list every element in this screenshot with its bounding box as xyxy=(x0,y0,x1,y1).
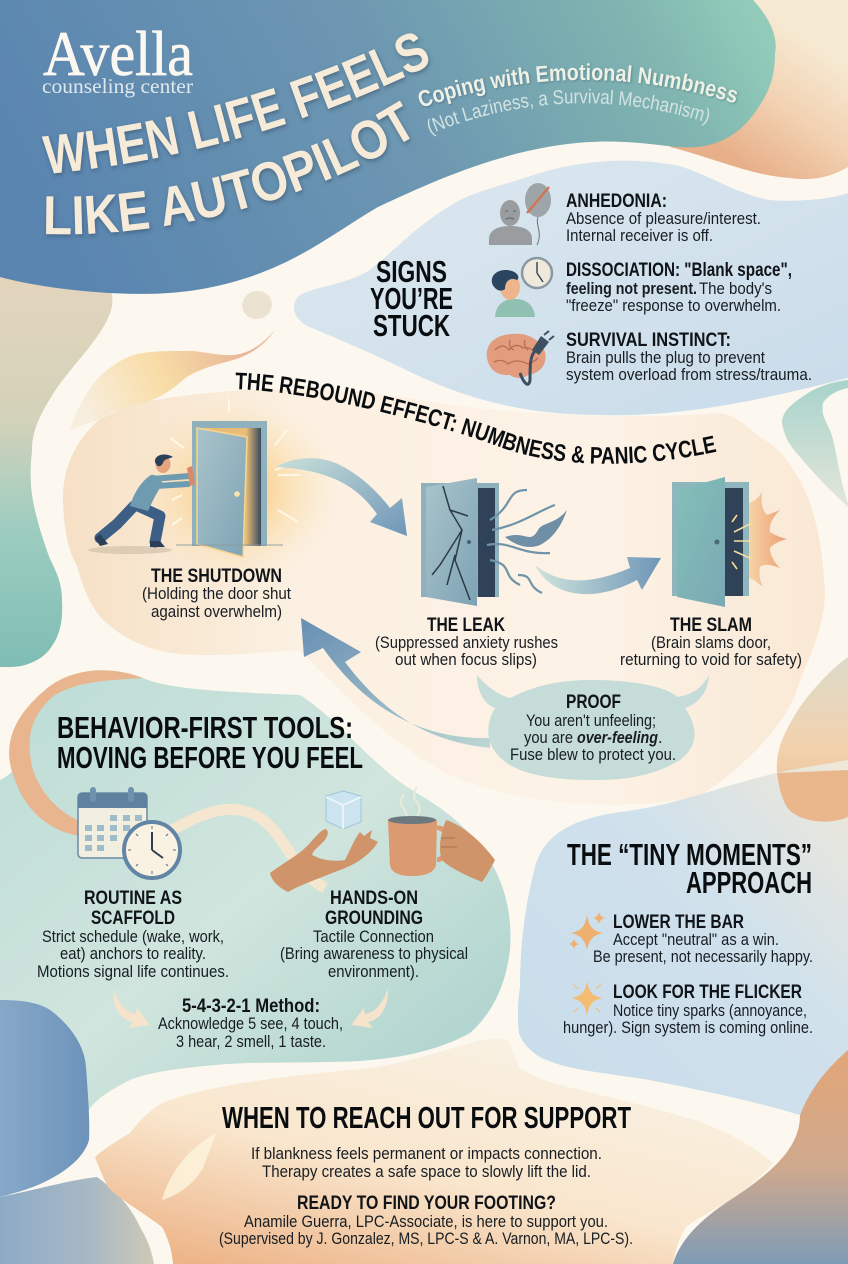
heading: when to reach out: WHEN TO REACH OUT FOR SUPPORT xyxy=(222,1100,631,1135)
text: hands-on grounding: environment). xyxy=(328,963,419,981)
text: ready to find your footing: (Supervised by J. Gonzalez, MS, LPC-S & A. Varnon, MA, LPC-S). xyxy=(219,1230,633,1248)
heading: the rebound effect: THE REBOUND EFFECT: NUMBNESS & PANIC CYCLE xyxy=(236,372,716,464)
heading: tiny moments xyxy=(567,837,812,900)
heading: signs you're stuck: STUCK xyxy=(373,308,450,343)
text: survival instinct: SURVIVAL INSTINCT: xyxy=(566,330,731,351)
text: 5-4-3-2-1 method: 3 hear, 2 smell, 1 taste. xyxy=(176,1033,326,1051)
heading: behavior-first tools: BEHAVIOR-FIRST TOOLS: xyxy=(57,710,353,745)
text: hands-on grounding: GROUNDING xyxy=(325,908,423,929)
title: When life feels like autopilot: WHEN LIFE FEELS xyxy=(42,33,431,177)
text: dissociation: feeling not present. xyxy=(566,280,697,298)
illustration: shutdown door and person xyxy=(88,395,340,585)
callout: proof: Fuse blew to protect you. xyxy=(510,746,676,764)
icon: sparkles xyxy=(569,912,605,950)
icon: flicker spark xyxy=(571,981,603,1016)
text: lower the bar xyxy=(593,912,813,966)
icon: calendar and clock xyxy=(78,787,180,878)
text: ready to find your footing: Anamile Guerra, LPC-Associate, is here to support you. xyxy=(244,1213,608,1231)
label: the slam xyxy=(620,615,802,669)
label: the shutdown xyxy=(142,566,291,621)
text: anhedonia xyxy=(566,191,761,245)
callout: proof: . xyxy=(658,729,663,747)
text: look for the flicker: LOOK FOR THE FLICKER xyxy=(613,982,802,1003)
text: anhedonia: Internal receiver is off. xyxy=(566,227,713,245)
subtitle: coping with emotional numbness xyxy=(418,63,739,136)
text: look for the flicker: hunger). Sign system is coming online. xyxy=(563,1019,813,1037)
text: routine as scaffold xyxy=(37,888,229,981)
illustration: cracked door with leak xyxy=(421,478,567,606)
callout: proof xyxy=(477,675,709,780)
text: dissociation xyxy=(566,260,792,315)
heading: behavior-first tools xyxy=(57,710,363,775)
logo: Avella counseling center: Avella xyxy=(43,18,193,89)
heading: signs you're stuck xyxy=(370,254,453,343)
icon: grey person with crossed balloon xyxy=(489,183,551,245)
arrow: shutdown to leak xyxy=(276,458,407,536)
text: survival instinct: Brain pulls the plug to prevent xyxy=(566,349,765,367)
text: therapy message: If blankness feels permanent or impacts connection. xyxy=(251,1145,602,1163)
text: survival instinct xyxy=(566,330,812,384)
logo: Avella counseling center: counseling center xyxy=(42,74,193,98)
subtitle: coping with emotional numbness: Coping with Emotional Numbness xyxy=(418,63,739,108)
text: ready to find your footing: READY TO FIND YOUR FOOTING? xyxy=(297,1193,556,1214)
label: the shutdown: (Holding the door shut xyxy=(142,585,291,603)
arrow: grounding to method xyxy=(351,988,388,1028)
panel: signs you're stuck xyxy=(294,161,848,415)
label: the leak: (Suppressed anxiety rushes xyxy=(375,634,558,652)
text: therapy message xyxy=(251,1145,602,1181)
heading: signs you're stuck: SIGNS xyxy=(376,254,447,289)
arrow: proof back to shutdown xyxy=(301,618,490,748)
text: dissociation: The body's xyxy=(699,280,772,298)
text: routine as scaffold: Strict schedule (wake, work, xyxy=(42,928,224,946)
text: survival instinct: system overload from stress/trauma. xyxy=(566,366,812,384)
icon: brain with unplugged cord xyxy=(487,331,554,384)
text: anhedonia: ANHEDONIA: xyxy=(566,191,667,212)
text: hands-on grounding: Tactile Connection xyxy=(313,928,434,946)
subtitle: coping with emotional numbness: (Not Laziness, a Survival Mechanism) xyxy=(428,88,710,136)
text: 5-4-3-2-1 method: 5-4-3-2-1 Method: xyxy=(182,996,320,1017)
text: lower the bar: LOWER THE BAR xyxy=(613,912,744,933)
label: the leak: out when focus slips) xyxy=(395,651,537,669)
text: therapy message: Therapy creates a safe space to slowly lift the lid. xyxy=(262,1163,591,1181)
text: 5-4-3-2-1 method xyxy=(158,996,343,1051)
panel: behavior-first tools xyxy=(0,670,510,1110)
text: routine as scaffold: SCAFFOLD xyxy=(91,908,175,929)
text: lower the bar: Be present, not necessarily happy. xyxy=(593,948,813,966)
label: the leak xyxy=(375,615,558,669)
text: ready to find your footing xyxy=(219,1193,633,1248)
panel: tiny moments approach xyxy=(518,760,848,1115)
icon: hand holding warm mug xyxy=(388,787,495,882)
heading: signs you're stuck: YOU’RE xyxy=(370,281,453,316)
label: the slam: (Brain slams door, xyxy=(651,634,771,652)
panel: when to reach out xyxy=(95,1039,773,1264)
label: the slam: THE SLAM xyxy=(670,615,752,636)
text: hands-on grounding xyxy=(280,888,468,981)
callout: proof: over-feeling xyxy=(577,729,658,747)
text: dissociation: "freeze" response to overwhelm. xyxy=(566,297,781,315)
text: look for the flicker: Notice tiny sparks (annoyance, xyxy=(613,1002,807,1020)
text: look for the flicker xyxy=(563,982,813,1037)
text: routine as scaffold: ROUTINE AS xyxy=(84,888,182,909)
text: hands-on grounding: HANDS-ON xyxy=(330,888,418,909)
text: hands-on grounding: (Bring awareness to physical xyxy=(280,945,468,963)
callout: proof: you are xyxy=(524,729,573,747)
text: routine as scaffold: Motions signal life continues. xyxy=(37,963,229,981)
text: routine as scaffold: eat) anchors to reality. xyxy=(60,945,206,963)
label: the slam: returning to void for safety) xyxy=(620,651,802,669)
text: anhedonia: Absence of pleasure/interest. xyxy=(566,210,761,228)
callout: proof: You aren't unfeeling; xyxy=(526,712,656,730)
panel: title banner xyxy=(0,0,776,294)
label: the shutdown: THE SHUTDOWN xyxy=(151,566,282,587)
heading: behavior-first tools: MOVING BEFORE YOU FEEL xyxy=(57,740,363,775)
label: the shutdown: against overwhelm) xyxy=(151,603,282,621)
text: lower the bar: Accept "neutral" as a win. xyxy=(613,931,779,949)
icon: person with clock xyxy=(492,258,552,317)
illustration: slammed door xyxy=(672,477,787,607)
panel: rebound effect cycle xyxy=(63,372,825,804)
callout: proof: PROOF xyxy=(566,692,621,713)
title: When life feels like autopilot: LIKE AUTOPILOT xyxy=(45,100,412,238)
arrow: routine to method xyxy=(113,988,150,1028)
arrow: leak to slam xyxy=(535,557,661,594)
icon: hand with ice cube xyxy=(270,791,378,892)
text: dissociation: DISSOCIATION: "Blank space", xyxy=(566,260,792,281)
label: the leak: THE LEAK xyxy=(427,615,505,636)
text: 5-4-3-2-1 method: Acknowledge 5 see, 4 touch, xyxy=(158,1015,343,1033)
